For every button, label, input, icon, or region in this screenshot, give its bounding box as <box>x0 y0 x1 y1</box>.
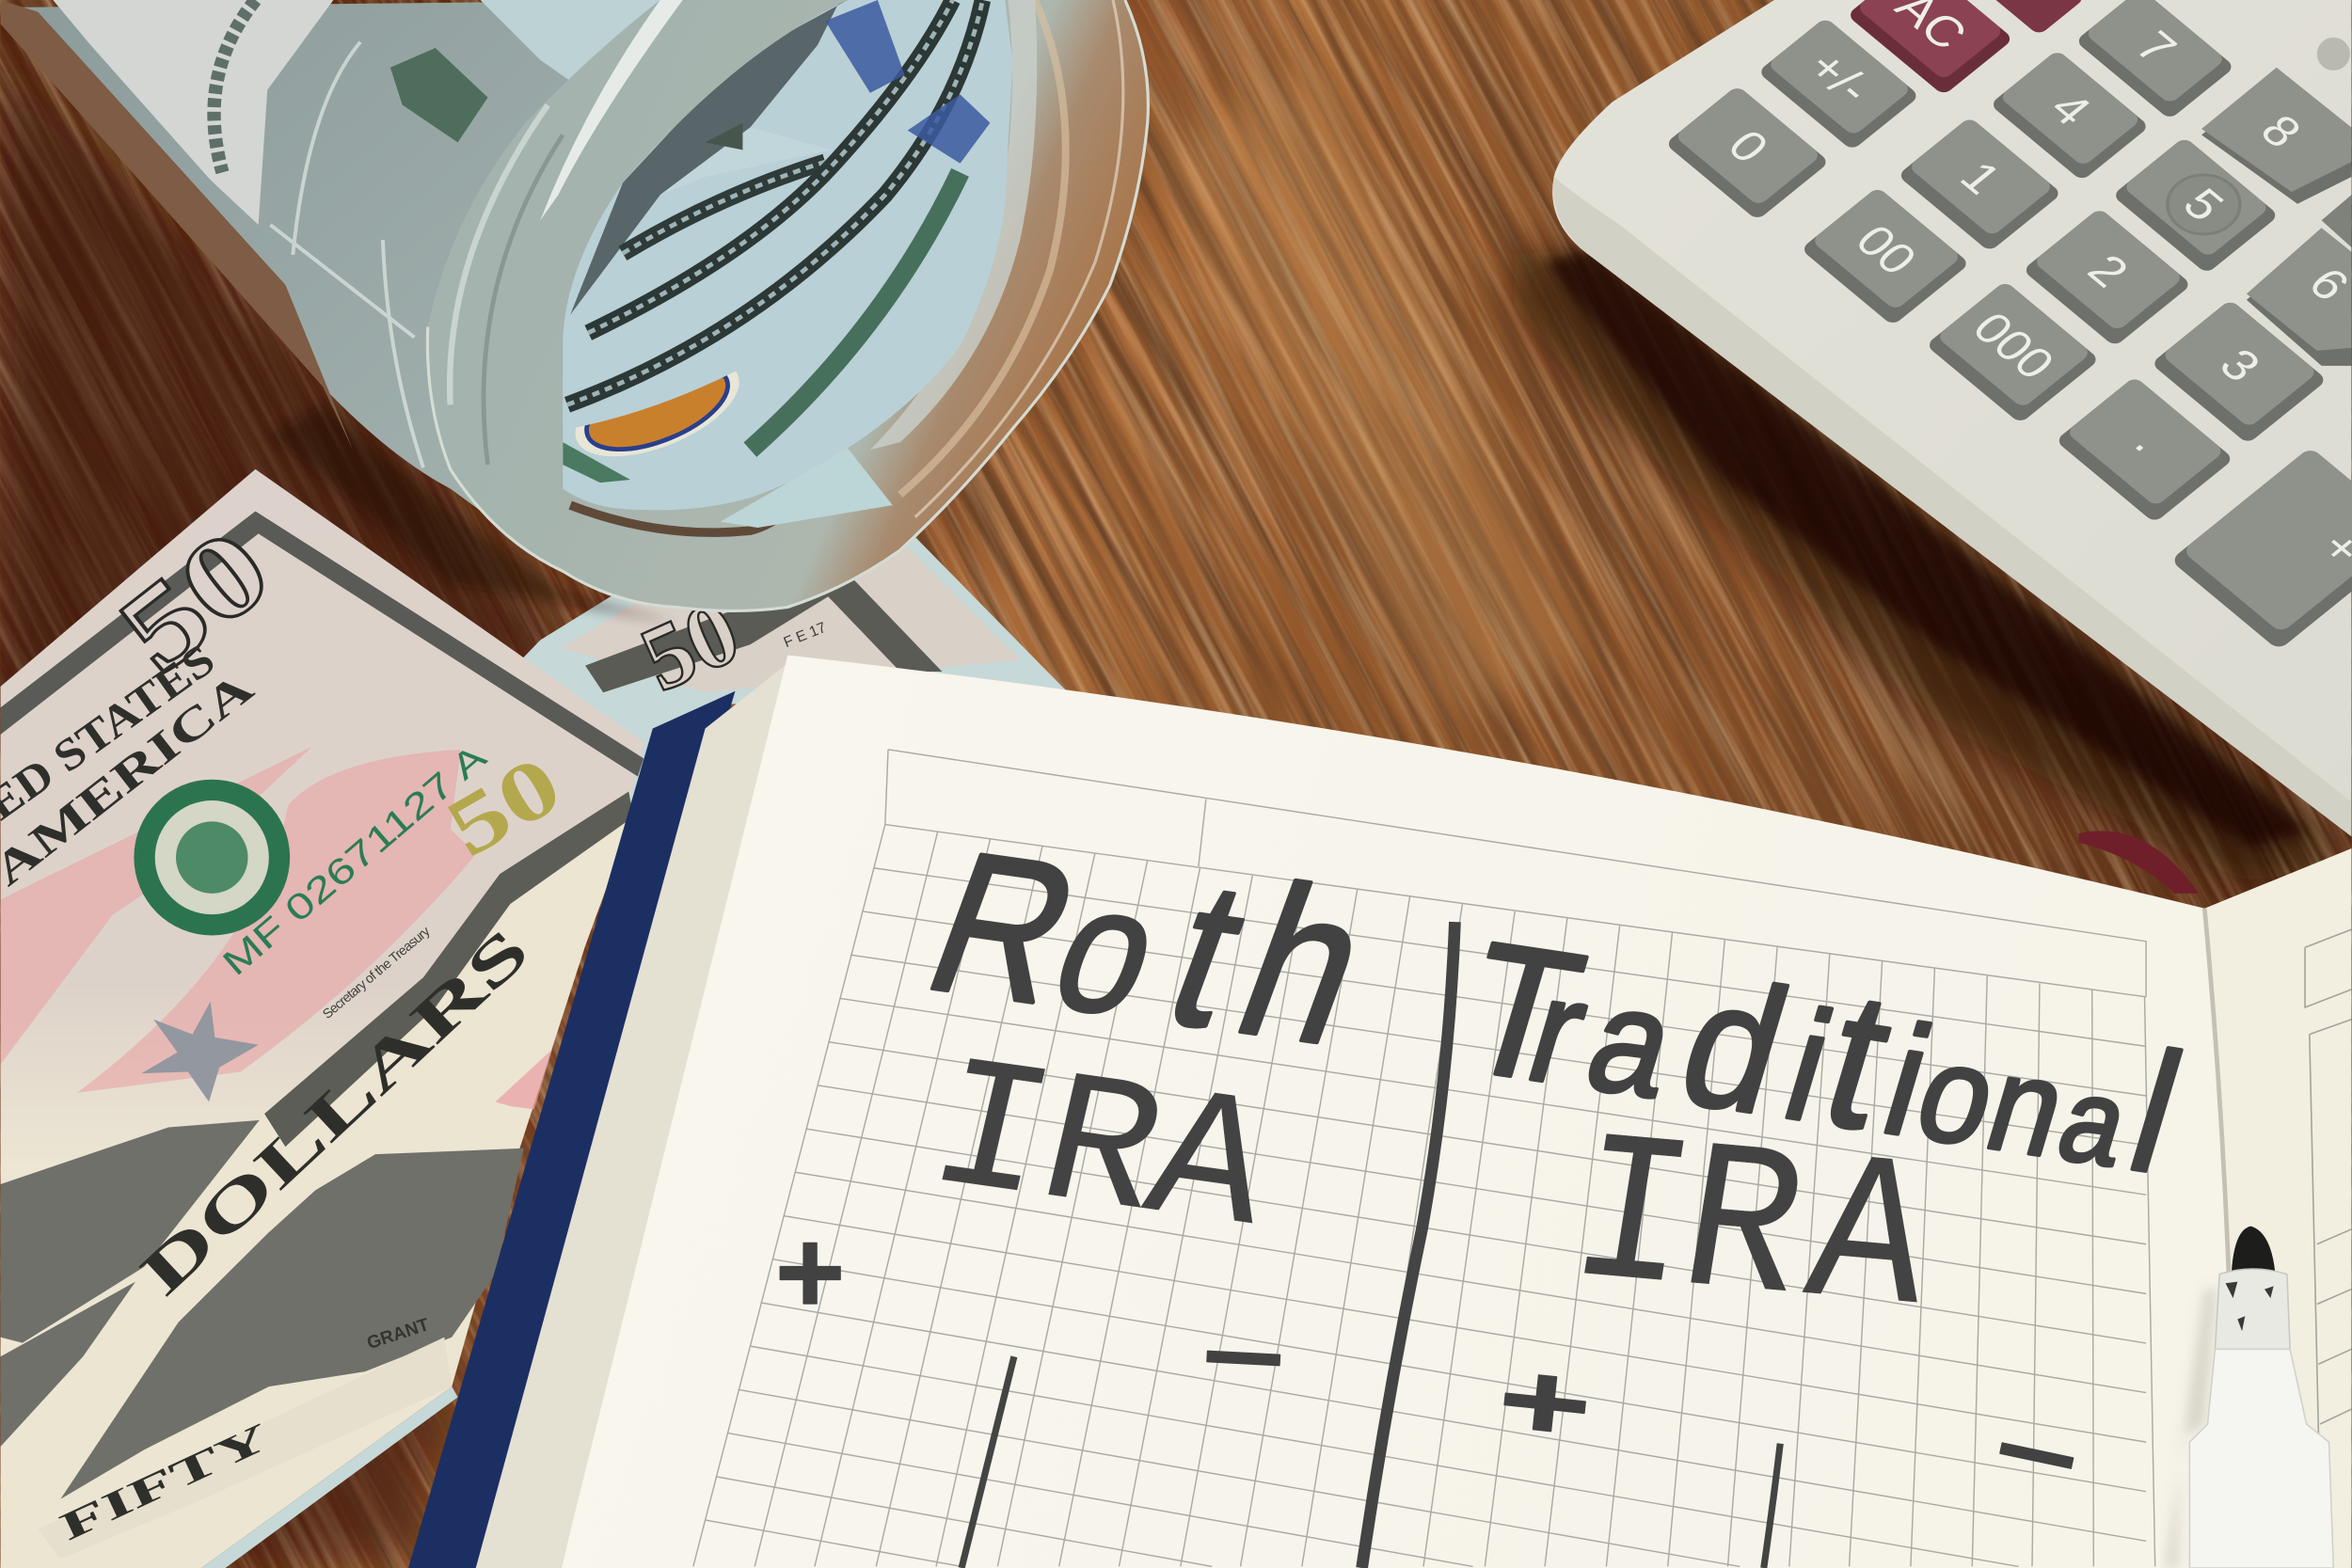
calculator keys: 7 <box>2125 22 2187 72</box>
Roth column line <box>961 1356 1014 1568</box>
rim highlights <box>540 0 683 220</box>
second grant label <box>1 1282 135 1447</box>
green patch through glass <box>390 48 487 142</box>
bill yellow 50: 50 <box>431 737 577 876</box>
pale bill sliver in rim <box>721 449 893 528</box>
red ribbon <box>2078 831 2199 894</box>
right page grid <box>2305 929 2351 1566</box>
key 6 <box>2247 228 2351 351</box>
bill serial number: MF 02671127 A <box>215 736 495 984</box>
under bill with 50 corner <box>1 450 1068 1499</box>
small round button <box>2317 38 2350 71</box>
calculator <box>1552 0 2352 836</box>
keys cut by right edge <box>2322 195 2351 247</box>
heading: Traditional: a <box>1571 956 1693 1129</box>
key 8 <box>2201 68 2351 192</box>
lettering strip on lower bill <box>38 1338 452 1559</box>
white marker pen <box>2166 1227 2333 1568</box>
marker shadow <box>2166 1290 2217 1568</box>
rim lower reflections <box>570 505 787 532</box>
rolled bill seen through glass <box>53 0 333 225</box>
bill pink wave <box>77 750 476 1093</box>
notes inside jar <box>555 0 1020 517</box>
page stack edge <box>476 659 792 1568</box>
wood seen through jar wall <box>1 0 353 450</box>
calculator keys: 2 <box>2077 245 2139 296</box>
Roth minus sign: − <box>1199 1301 1288 1415</box>
heading: Traditional: a <box>2045 1053 2143 1191</box>
heading: right IRA: R <box>1666 1106 1819 1354</box>
calculator keys: 3 <box>2209 340 2271 390</box>
notebook right page <box>2204 848 2351 1568</box>
glass jar full of money <box>1 0 1148 622</box>
calculator keys: 00 <box>1845 215 1928 284</box>
heading: Traditional: i <box>1768 978 1850 1153</box>
notebook left page <box>562 655 2234 1568</box>
engraving on rolled bill <box>215 0 255 172</box>
marker shoulder and barrel <box>2189 1349 2333 1568</box>
heading: Traditional: n <box>1972 1029 2082 1185</box>
heading: Traditional: i <box>1867 992 1948 1167</box>
heading: Roth: h <box>1211 842 1398 1089</box>
marker ink speckles <box>2226 1282 2274 1331</box>
grid on page <box>693 750 2155 1566</box>
Traditional column line <box>1764 1444 1780 1568</box>
heading: left IRA: R <box>1022 1039 1181 1263</box>
DOLLARS band <box>1 791 633 1492</box>
heading: Traditional: t <box>1803 951 1914 1169</box>
portrait engraving on lower bill <box>60 1148 524 1499</box>
calculator body <box>1552 0 2351 836</box>
glass wall highlights <box>270 42 423 467</box>
heading: Traditional: r <box>1512 947 1604 1116</box>
calculator keys: 4 <box>2040 84 2102 135</box>
bill lettering <box>0 634 263 895</box>
bill signature: Secretary of the Treasury <box>320 924 434 1022</box>
bill pink seal wash <box>1 747 312 1065</box>
heading: Roth: t <box>1142 838 1273 1070</box>
calculator keys: 0 <box>1717 121 1780 172</box>
rim outline <box>427 0 1148 610</box>
pink wash on lower bill <box>495 1050 552 1109</box>
heading: Traditional: o <box>1901 1015 2013 1175</box>
marker tip <box>2232 1227 2275 1271</box>
bill star <box>141 1002 259 1101</box>
gutter line <box>2204 909 2234 1566</box>
second red key <box>1970 0 2086 36</box>
bill portrait engraving <box>1 1119 264 1345</box>
key 8 base <box>2201 75 2351 204</box>
DOLLARS band: DOLLARS <box>128 915 543 1308</box>
pale blue bill edge <box>201 1386 458 1568</box>
jar body <box>1 0 691 571</box>
key 8 digit: 8 <box>2250 105 2312 156</box>
lower bill with engraved portrait <box>1 946 585 1568</box>
bill corner 50: 50 <box>95 503 294 698</box>
Traditional minus sign: − <box>1984 1393 2090 1518</box>
heading: Traditional: l <box>2111 1017 2201 1209</box>
calculator keys: +/- <box>1797 42 1883 113</box>
notebook blue cover <box>408 691 735 1568</box>
pale inner rim band <box>870 0 1037 450</box>
divider line <box>1362 922 1454 1568</box>
Traditional plus sign: + <box>1492 1338 1597 1467</box>
calculator keys: 1 <box>1949 152 2012 203</box>
main fifty dollar bill <box>0 469 644 1499</box>
under bill with 50 corner: F E 17 <box>782 620 829 651</box>
second grant label: GRANT <box>55 1374 121 1417</box>
bill engraved border <box>1 511 644 777</box>
bill green seal <box>134 780 290 935</box>
pale bill behind glass <box>481 0 706 102</box>
jar contact shadow <box>270 404 675 622</box>
heading: Roth: R <box>903 811 1105 1045</box>
heading: right IRA: A <box>1792 1117 1946 1366</box>
heading: left IRA: I <box>912 1024 1071 1247</box>
jar mouth glass rim <box>427 0 1148 610</box>
heading: right IRA: I <box>1556 1096 1708 1345</box>
heading: left IRA: A <box>1128 1054 1288 1278</box>
lower bill with engraved portrait: GRANT <box>365 1315 432 1354</box>
Roth plus sign: + <box>775 1206 845 1339</box>
lower bill with engraved portrait: FIFTY <box>54 1415 276 1548</box>
calculator keys: . <box>2124 419 2176 461</box>
heading: Traditional: d <box>1661 942 1808 1150</box>
notebook <box>408 655 2351 1568</box>
under bill with 50 corner: 50 <box>627 580 754 711</box>
heading: Traditional: T <box>1440 905 1602 1121</box>
key 6 base <box>2247 237 2351 366</box>
heading: Roth: o <box>1031 848 1185 1053</box>
marker collar <box>2215 1269 2290 1349</box>
calculator keys: 000 <box>1963 303 2065 388</box>
calculator keys: 5 <box>2172 179 2234 230</box>
calculator keys <box>1665 0 2352 650</box>
